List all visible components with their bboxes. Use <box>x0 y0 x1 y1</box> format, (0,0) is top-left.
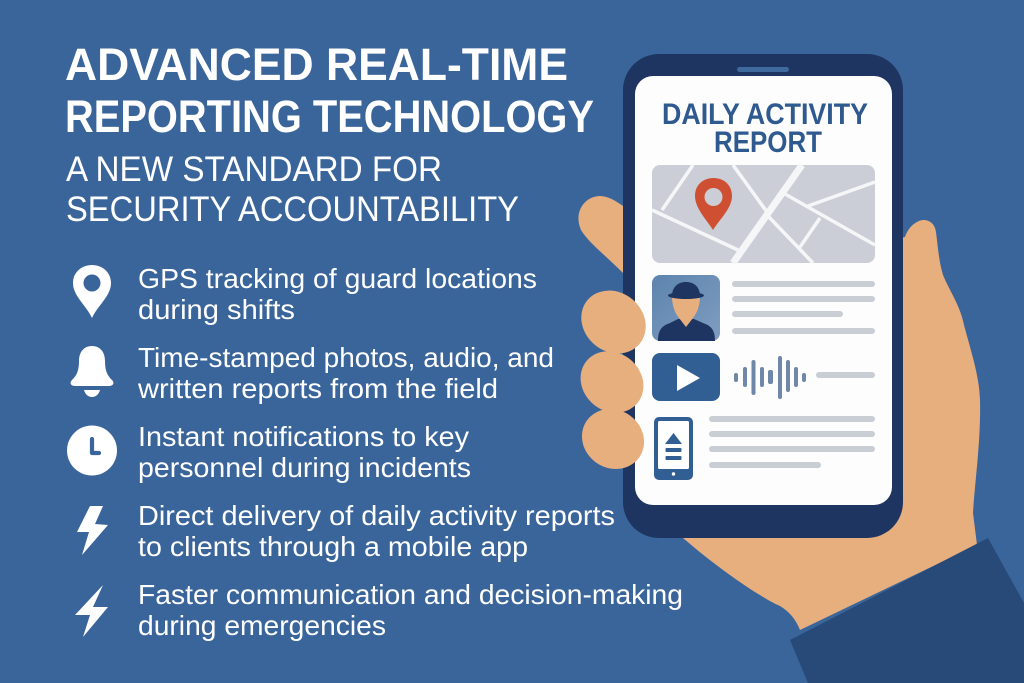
fingers <box>568 278 659 481</box>
hand: palm <box>640 220 980 630</box>
feature text 1: GPS tracking of guard locations <box>138 263 537 294</box>
title: ADVANCED REAL-TIME <box>65 39 568 90</box>
report text lines 2 <box>709 416 875 468</box>
feature text 2: Time-stamped photos, audio, and <box>138 342 554 373</box>
screen heading: REPORT <box>714 126 822 159</box>
audio waveform <box>734 356 875 399</box>
screen <box>635 76 892 505</box>
icon: clock <box>67 426 117 476</box>
screen heading <box>662 98 868 159</box>
video tile <box>652 353 720 401</box>
report text lines 1 <box>732 281 875 334</box>
feature text 5: during emergencies <box>138 610 386 641</box>
subtitle <box>66 150 519 229</box>
feature text 3 <box>138 421 471 483</box>
feature text 1 <box>138 263 537 325</box>
feature text 1: during shifts <box>138 294 295 325</box>
feature text 2 <box>137 342 554 404</box>
guard photo <box>652 275 720 341</box>
screen heading: DAILY ACTIVITY <box>662 98 868 131</box>
phone <box>623 54 903 538</box>
map <box>652 165 875 263</box>
title <box>65 39 594 142</box>
subtitle: A NEW STANDARD FOR <box>66 150 442 189</box>
speaker <box>737 67 789 72</box>
feature text 4: to clients through a mobile app <box>138 531 528 562</box>
feature text 5 <box>138 579 683 641</box>
hand holding phone <box>578 196 1024 683</box>
feature text 3: Instant notifications to key <box>138 421 469 452</box>
feature text 4: Direct delivery of daily activity reports <box>138 500 615 531</box>
mini phone icon <box>654 417 693 480</box>
phone body <box>623 54 903 538</box>
feature text 4 <box>138 500 615 562</box>
subtitle: SECURITY ACCOUNTABILITY <box>66 190 519 229</box>
sleeve <box>790 538 1024 683</box>
title: REPORTING TECHNOLOGY <box>65 91 594 142</box>
feature text 3: personnel during incidents <box>138 452 471 483</box>
feature text 5: Faster communication and decision-making <box>138 579 683 610</box>
icon: location pin <box>73 265 111 318</box>
map pin <box>695 178 732 230</box>
feature text 2: written reports from the field <box>137 373 498 404</box>
icon: lightning bolt <box>77 506 108 555</box>
icon: lightning bolt <box>75 585 108 637</box>
hand: thumb <box>578 196 640 290</box>
icon: bell <box>71 346 113 397</box>
